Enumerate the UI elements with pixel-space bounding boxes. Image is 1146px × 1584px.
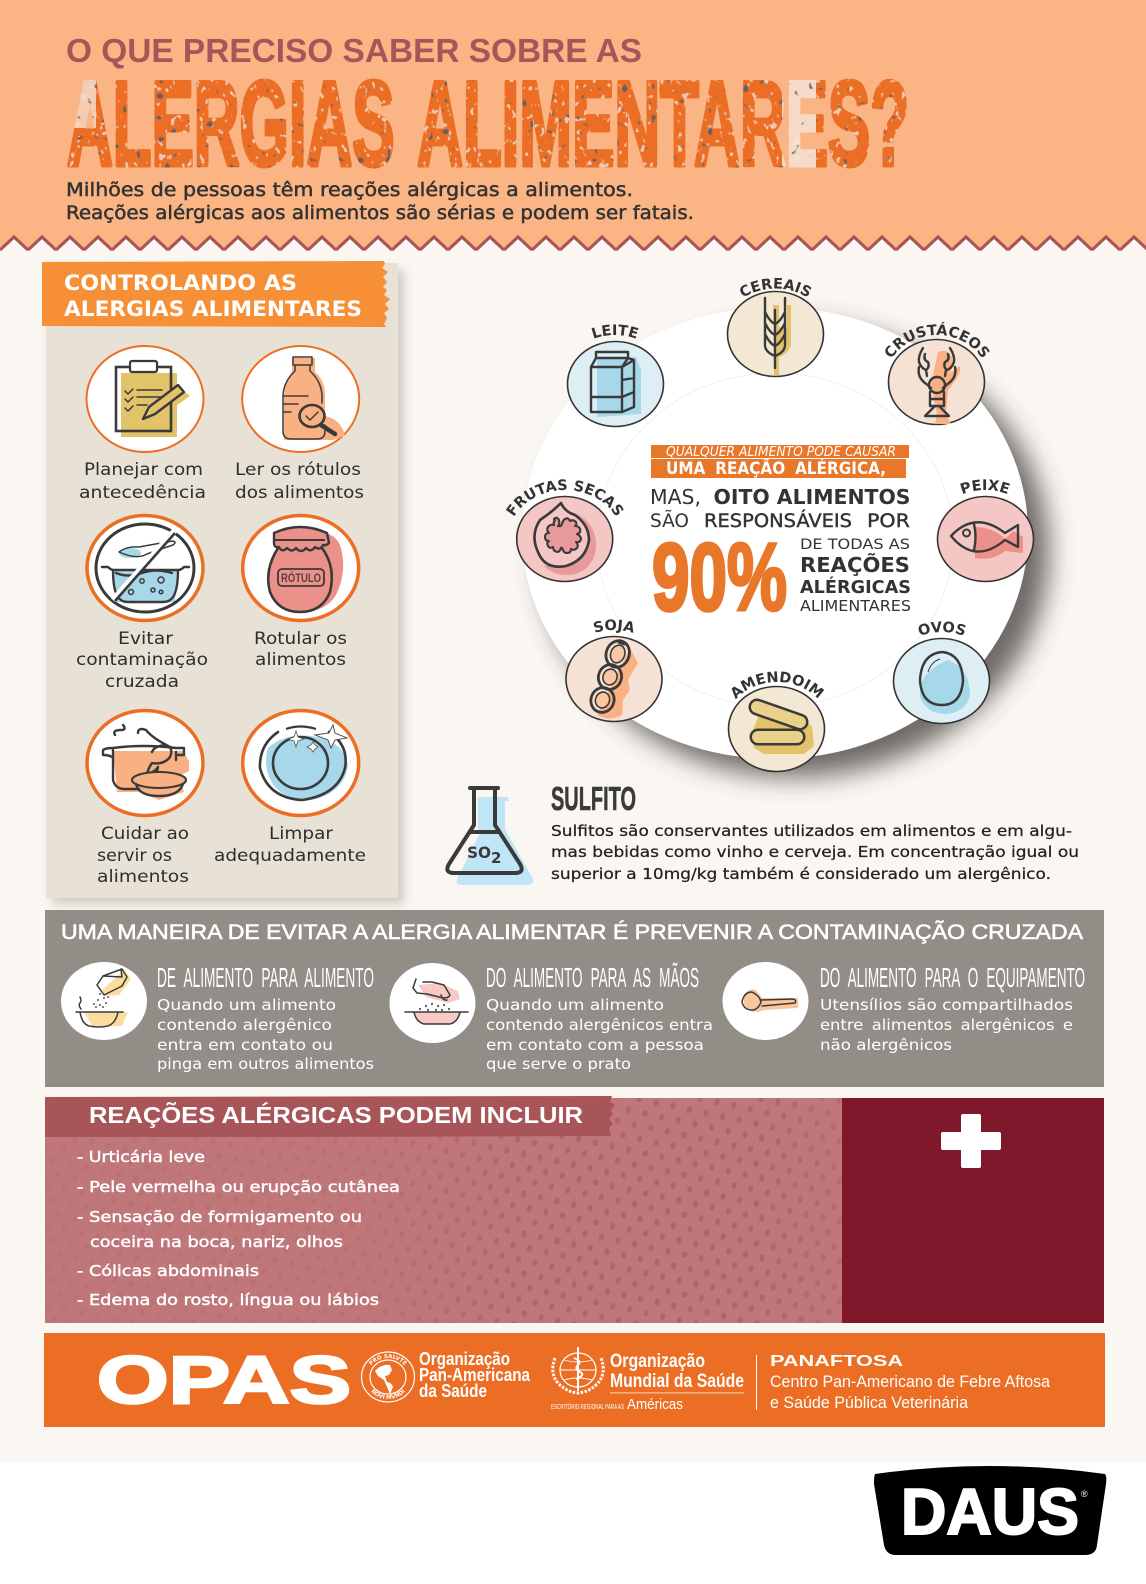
emblem: WHO: [553, 1347, 603, 1393]
food: crustaceos: CRUSTÁCEOS: [885, 322, 990, 357]
icon: rotular: RÓTULO: [281, 570, 321, 585]
sub-block 1: pinga em outros alimentos: [157, 1055, 374, 1073]
icon: alimento para equipamento: [722, 962, 808, 1040]
panel: controlando as alergias: [42, 261, 404, 904]
icon: rotular: [243, 516, 359, 620]
PANAFTOSA: PANAFTOSA: [770, 1353, 904, 1370]
caption: cuidar: servir os: [97, 846, 172, 866]
icon: evitar contaminacao: [87, 516, 203, 620]
food: cereais: [726, 278, 824, 378]
central text: OITO ALIMENTOS: [714, 485, 910, 509]
sub-block 2: Quando um alimento: [486, 996, 664, 1014]
OPAS name: Pan-Americana: [419, 1365, 531, 1385]
caption: rotulos: Ler os rótulos: [235, 460, 361, 480]
caption: limpar: Limpar: [269, 824, 333, 844]
intro text: [66, 179, 694, 224]
callout orange bars: [651, 445, 909, 478]
central text: ALÉRGICAS: [800, 576, 911, 598]
food: amendoim: AMENDOIM: [732, 671, 824, 700]
central text: MAS,: [650, 485, 701, 509]
WHO name: Organização: [610, 1351, 705, 1372]
PANAFTOSA: Centro Pan-Americano de Febre Aftosa: [770, 1373, 1051, 1391]
sub-block 1: entra em contato ou: [157, 1036, 333, 1054]
caption: planejar: Planejar com: [84, 460, 203, 480]
sulfito section: [447, 780, 1079, 885]
logo: DAUS: ®: [1081, 1489, 1088, 1499]
food: leite: [566, 324, 664, 428]
icon: planejar: [86, 346, 204, 452]
caption: rotular: Rotular os: [254, 629, 347, 649]
sub-block 3: Utensílios são compartilhados: [820, 996, 1073, 1014]
emblem: OPAS: PRO SALVTE: [368, 1354, 408, 1366]
food: peixe: [936, 479, 1034, 582]
reactions list: - Sensação de formigamento ou: [77, 1208, 362, 1226]
WHO name: Mundial da Saúde: [610, 1371, 744, 1392]
logo: OPAS: OPAS: [97, 1343, 351, 1418]
caption: evitar: Evitar: [118, 629, 173, 649]
food: frutas secas: FRUTAS SECAS: [506, 479, 624, 516]
sub-block 2: em contato com a pessoa: [486, 1036, 704, 1054]
sub-block 2: que serve o prato: [486, 1055, 631, 1073]
caption: cuidar: [97, 824, 189, 887]
icon: rotulos: [242, 346, 359, 452]
logo: DAUS: DAUS: [901, 1475, 1079, 1548]
intro text: Reações alérgicas aos alimentos são sérias e podem ser fatais.: [66, 202, 694, 224]
caption: cuidar: Cuidar ao: [101, 824, 189, 844]
sub-block 3: não alergênicos: [820, 1036, 952, 1054]
PANAFTOSA: e Saúde Pública Veterinária: [770, 1394, 969, 1412]
central text: POR: [867, 510, 910, 532]
food: frutas secas: [506, 479, 624, 582]
central text: SÃO: [650, 509, 689, 532]
icon: limpar: [243, 710, 359, 816]
callout orange bars: QUALQUER ALIMENTO PODE CAUSAR: [666, 445, 896, 460]
icon: cross: [941, 1114, 1001, 1168]
WHO name: [551, 1351, 744, 1413]
caption: limpar: [214, 824, 366, 866]
icon: flask: SO: [467, 843, 491, 862]
icon: flask: 2: [491, 849, 501, 867]
reactions list: - Cólicas abdominais: [77, 1262, 259, 1280]
90 percent: 90%: [652, 524, 787, 631]
emblem: OPAS: NOVI MVNDI: [371, 1389, 405, 1400]
WHO name: ESCRITÓRIO REGIONAL PARA AS: [551, 1402, 624, 1411]
caption: planejar: antecedência: [79, 483, 206, 503]
big circle: oito alimentos: [506, 278, 1070, 798]
reactions list: - Edema do rosto, língua ou lábios: [77, 1291, 379, 1309]
reactions banner: REAÇÕES ALÉRGICAS PODEM INCLUIR: [89, 1101, 583, 1128]
logo: DAUS: [874, 1466, 1106, 1555]
caption: evitar: contaminação: [76, 650, 208, 670]
sub-block 1: Quando um alimento: [157, 996, 336, 1014]
OPAS name: [419, 1349, 531, 1401]
panel: contaminacao cruzada: [45, 910, 1104, 1087]
band heading: UMA MANEIRA DE EVITAR A ALERGIA ALIMENTAR É PREVENIR A CONTAMINAÇÃO CRUZADA: [61, 919, 1084, 944]
caption: cuidar: alimentos: [97, 867, 189, 887]
intro text: Milhões de pessoas têm reações alérgicas a alimentos.: [66, 179, 633, 201]
PANAFTOSA: [770, 1353, 1051, 1412]
OPAS name: da Saúde: [419, 1381, 487, 1401]
central text: REAÇÕES: [800, 552, 910, 577]
WHO name: Américas: [627, 1396, 683, 1413]
caption: rotulos: dos alimentos: [235, 483, 364, 503]
food: amendoim: [728, 671, 826, 772]
food: peixe: PEIXE: [960, 479, 1010, 494]
sulfito text: Sulfitos são conservantes utilizados em alimentos e em algu-: [551, 822, 1072, 840]
icon: flask: [447, 788, 533, 885]
caption: evitar: [76, 629, 208, 692]
reactions list: - Pele vermelha ou erupção cutânea: [77, 1178, 400, 1196]
food: leite: LEITE: [592, 324, 638, 338]
reactions list: - Urticária leve: [77, 1148, 205, 1166]
central text: RESPONSÁVEIS: [704, 509, 852, 532]
caption: rotular: alimentos: [255, 650, 346, 670]
reactions list: coceira na boca, nariz, olhos: [90, 1233, 343, 1251]
central text: DE TODAS AS: [800, 537, 910, 553]
food: soja: [565, 619, 663, 722]
food: crustaceos: [885, 322, 990, 426]
sulfito text: superior a 10mg/kg também é considerado um alergênico.: [551, 865, 1051, 883]
caption: limpar: adequadamente: [214, 846, 366, 866]
food: soja: SOJA: [594, 619, 634, 633]
reactions banner: [45, 1096, 615, 1137]
sub-block 3: entre alimentos alergênicos e: [820, 1016, 1073, 1034]
sub-block 1: contendo alergênico: [157, 1016, 332, 1034]
panel: reacoes alergicas: [45, 1096, 1104, 1323]
panel banner: [42, 261, 390, 327]
reactions list: [77, 1148, 400, 1309]
sub-block 1: [157, 962, 374, 1073]
sub-block 3: [820, 962, 1085, 1054]
sulfito text: mas bebidas como vinho e cerveja. Em concentração igual ou: [551, 843, 1079, 861]
emblem: OPAS: [360, 1351, 416, 1403]
callout orange bars: UMA REAÇÃO ALÉRGICA,: [666, 459, 886, 478]
food: ovos: OVOS: [918, 621, 966, 635]
caption: rotular: [254, 629, 347, 670]
panel banner: ALERGIAS ALIMENTARES: [64, 297, 362, 322]
panel: contaminacao cruzada: DE ALIMENTO PARA ALIMENTO: [157, 962, 374, 993]
central text: [650, 485, 911, 615]
title line 1: O QUE PRECISO SABER SOBRE AS: [66, 33, 642, 70]
OPAS name: Organização: [419, 1349, 510, 1369]
central text: ALIMENTARES: [800, 597, 911, 615]
food: cereais: CEREAIS: [740, 278, 812, 296]
caption: rotulos: [235, 460, 364, 503]
caption: evitar: cruzada: [105, 672, 179, 692]
icon: cuidar: [87, 710, 203, 816]
sub-block 2: DO ALIMENTO PARA AS MÃOS: [486, 962, 699, 993]
sub-block 2: contendo alergênicos entra: [486, 1016, 713, 1034]
sulfito text: [551, 822, 1079, 883]
sub-block 2: [486, 962, 713, 1073]
footer logos band: [44, 1333, 1105, 1427]
icon: alimento para maos: [390, 963, 476, 1043]
icon: alimento para alimento: [61, 962, 147, 1040]
panel banner: CONTROLANDO AS: [64, 271, 297, 296]
caption: planejar: [79, 460, 206, 503]
header band: [0, 0, 1146, 252]
food: ovos: [892, 621, 990, 724]
sulfito heading: SULFITO: [551, 780, 636, 817]
